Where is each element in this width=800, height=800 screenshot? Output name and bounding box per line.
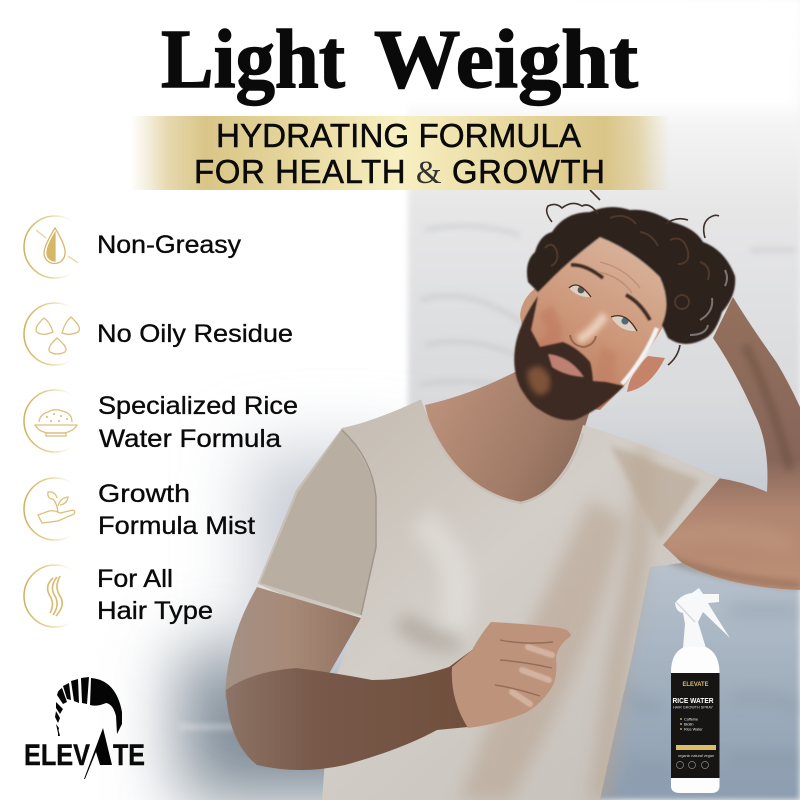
mouth [548,354,584,377]
sleeve shading [260,430,376,615]
logo: elevate: ELEV [24,739,90,772]
product bottle [671,588,730,793]
feature: all hair types [24,565,213,627]
neck and chest [425,372,590,503]
chin warm patch [527,366,550,395]
icon: hand with sprout [24,478,86,540]
hair [527,190,735,365]
bottle label: ELEVATE [682,681,709,688]
feature: rice water formula [24,390,298,453]
rim light [622,328,657,384]
icon: oil drop crossed [24,216,86,278]
raised right arm [660,297,800,590]
man figure [225,190,800,800]
icon: hair strands [24,565,86,627]
feature: all hair types: Hair Type [97,597,213,625]
trigger sprayer [675,588,730,648]
lowered left arm and fist [225,587,571,770]
feature: all hair types: For All [97,565,173,593]
bottle label [671,673,720,778]
forehead wrinkles [598,262,640,293]
skin shading [540,310,554,350]
subtitle banner: HYDRATING FORMULA [216,117,581,154]
soul patch [552,375,565,392]
feature: growth formula mist [24,478,255,540]
beard [514,296,624,420]
feature: rice water formula: Specialized Rice [98,392,298,420]
nose [570,335,596,347]
title: Light [161,13,345,106]
logo: elevate [24,677,145,779]
feature: rice water formula: Water Formula [99,425,281,453]
icon: rice bowl [24,390,86,452]
bottle label: Rice Water [684,728,703,732]
eye left [569,285,591,297]
feature: non-greasy: Non-Greasy [97,231,242,259]
logo spike [84,728,112,779]
title: Weight [374,13,638,106]
bottle label: Caffeine [684,718,698,722]
title [161,13,638,106]
feature: non-greasy [24,216,242,278]
t-shirt [257,400,720,800]
face [514,237,667,420]
bottle label: HAIR GROWTH SPRAY [673,706,714,710]
icon: three rounded drops [24,303,86,365]
feature: no oily residue [24,303,293,365]
bottle label: RICE WATER [672,696,714,705]
bottle body [671,647,720,793]
feature: growth formula mist: Formula Mist [98,512,255,540]
eye right [611,316,637,331]
right ear [627,356,665,392]
hair highlights [545,216,709,309]
logo: elevate: TE [113,739,145,772]
bottle label: organic natural vegan [678,754,714,758]
logo hair mark [55,677,122,736]
stray curls [547,190,719,365]
eyebrows [571,265,650,320]
bottle label: Biotin [684,722,694,726]
subtitle banner [130,116,670,191]
left ear [520,283,545,326]
feature: growth formula mist: Growth [98,480,190,508]
feature: no oily residue: No Oily Residue [97,320,293,348]
fist [452,622,571,728]
subtitle banner: FOR HEALTH & GROWTH [194,153,605,191]
